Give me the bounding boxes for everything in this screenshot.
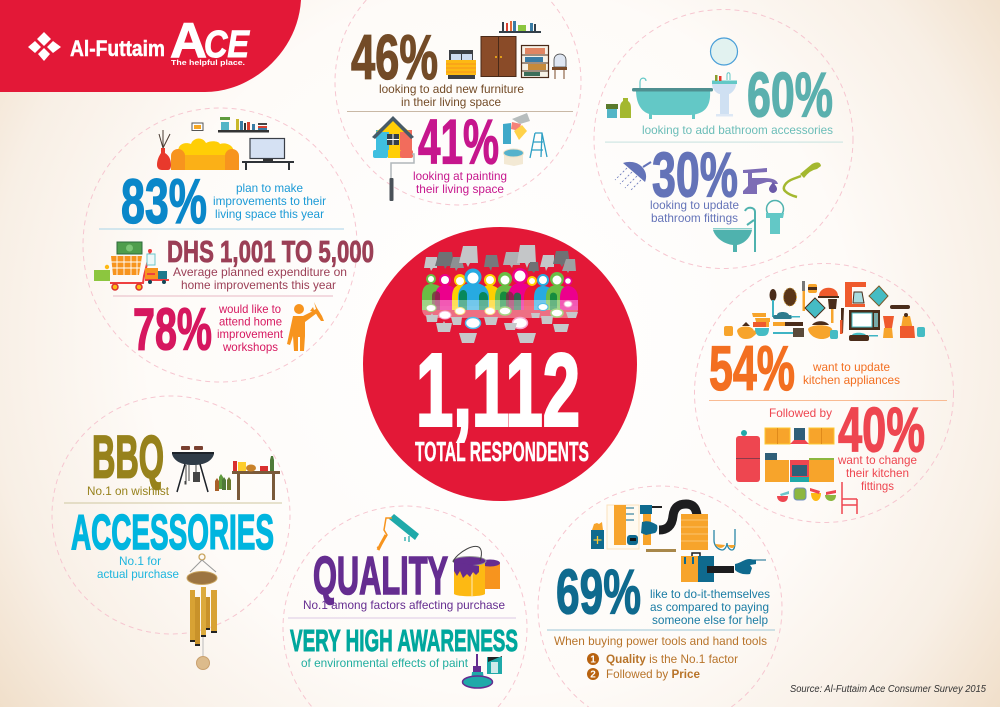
icon: basin with faucet (713, 208, 755, 252)
icon: paint roller (377, 514, 419, 550)
text: add new furniture: looking to add new furniture (379, 82, 524, 96)
text: plan to make improvements: plan to make (236, 181, 303, 195)
text: attend workshops (217, 302, 284, 354)
text: change kitchen fittings: their kitchen (846, 466, 909, 480)
stat: 46%: 46% (351, 23, 438, 93)
icon: Al-Futtaim emblem (28, 32, 61, 61)
icon: wind chime (187, 554, 217, 670)
panel: wishlist and purchases (52, 396, 290, 670)
text: when buying power tools: When buying power tools and hand tools (554, 634, 767, 648)
panel: bathroom (594, 10, 853, 268)
text: do-it-themselves (650, 587, 770, 627)
icon: fitted kitchen (736, 428, 834, 482)
icon: crowd of people (422, 268, 578, 318)
heading: quality: QUALITY (313, 546, 448, 606)
list item 1: quality: Quality is the No.1 factor (606, 652, 738, 666)
panel: total respondents (363, 227, 637, 501)
text: plan to make improvements (213, 181, 326, 221)
icon: bathtub, mirror and sink (606, 38, 738, 119)
text: update kitchen appliances: kitchen appliances (803, 373, 900, 387)
icon: bed, wardrobe, bookcase, dresser (446, 21, 567, 79)
text: no.1 for actual purchase: actual purchase (97, 567, 179, 581)
text: do-it-themselves: someone else for help (652, 613, 768, 627)
list item 1: quality: 1 (590, 654, 596, 666)
text: bathroom accessories: looking to add bathroom accessories (642, 123, 833, 137)
text: change kitchen fittings: want to change (837, 453, 917, 467)
logo text: Al-Futtaim: Al-Futtaim (70, 36, 165, 61)
stat: 41%: 41% (418, 108, 499, 178)
icon: brush and glove (462, 654, 502, 688)
stat: 54%: 54% (709, 334, 795, 404)
number: 1,112: 1,112 (416, 332, 580, 448)
text: painting their living space: looking at painting (413, 169, 507, 183)
text: plan to make improvements: improvements to their (213, 194, 326, 208)
panel: do-it-yourself tools (538, 486, 782, 707)
stat: 40%: 40% (838, 396, 925, 466)
icon: worker with wrench (287, 302, 324, 351)
icon: tools (591, 504, 766, 582)
text: change kitchen fittings (837, 453, 917, 493)
icon: reflected crowd heads and bubbles (426, 301, 578, 343)
stat: 78%: 78% (133, 296, 212, 362)
icon: barbecue grill and table (172, 446, 280, 500)
icon: paint cans (453, 546, 500, 596)
heading: accessories: ACCESSORIES (71, 506, 274, 560)
text: attend workshops: workshops (222, 340, 278, 354)
icon: kitchen utensils (724, 281, 925, 341)
stat: 83%: 83% (121, 167, 207, 237)
text: add new furniture: in their living space (401, 95, 501, 109)
text: no.1 for actual purchase: No.1 for (119, 554, 161, 568)
text: attend workshops: would like to (218, 302, 281, 316)
text: do-it-themselves: like to do-it-themselves (650, 587, 770, 601)
text: add new furniture (379, 82, 524, 109)
heading: very high awareness: VERY HIGH AWARENESS (290, 623, 518, 658)
text: no.1 among factors: No.1 among factors affecting purchase (303, 598, 505, 612)
list item 2: price: Followed by Price (606, 667, 700, 681)
icon: house and paint roller (372, 116, 414, 201)
stat: 69%: 69% (556, 558, 641, 628)
list item 2: price: 2 (590, 670, 596, 680)
text: painting their living space (413, 169, 507, 196)
icon: swatches, paint can, ladder (503, 113, 547, 166)
stat: 30%: 30% (652, 140, 738, 210)
stat: 60%: 60% (747, 60, 833, 130)
text: followed by: Followed by (769, 406, 832, 420)
panel: furniture and painting (335, 0, 581, 205)
text: average planned expenditure (173, 265, 347, 292)
text: update bathroom fittings (650, 198, 739, 225)
panel: quality and awareness (283, 506, 527, 707)
logo text: ACE (170, 14, 250, 68)
text: no.1 for actual purchase (97, 554, 179, 581)
text: painting their living space: their living space (416, 182, 504, 196)
icon: speech bubbles above crowd (424, 245, 576, 273)
logo text: ACE: CE (204, 24, 250, 66)
icon: bowls and chair (777, 482, 857, 514)
icon: living room (157, 117, 294, 170)
label: total respondents: TOTAL RESPONDENTS (415, 436, 589, 467)
panel: kitchen (694, 264, 954, 522)
text: average planned expenditure: Average planned expenditure on (173, 265, 347, 279)
logo text: ACE: A (170, 14, 207, 68)
text: update bathroom fittings: bathroom fittings (651, 211, 738, 225)
icon: shower head (615, 162, 651, 191)
text: update bathroom fittings: looking to update (650, 198, 739, 212)
source note: Source: Al-Futtaim Ace Consumer Survey 2015 (790, 684, 986, 695)
text: attend workshops: attend home (219, 314, 282, 328)
text: plan to make improvements: living space this year (215, 207, 324, 221)
text: average planned expenditure: home improvements this year (181, 278, 336, 292)
text: environmental effects: of environmental effects of paint (301, 656, 469, 670)
text: no.1 on wishlist: No.1 on wishlist (87, 484, 170, 498)
icon: shopping cart, money and truck (94, 242, 169, 290)
heading: BBQ: BBQ (92, 424, 164, 490)
panel: living space improvements (83, 108, 374, 382)
heading: DHS 1,001 to 5,000: DHS 1,001 TO 5,000 (167, 234, 374, 269)
icon: tap, hose and towel ring (743, 162, 821, 234)
text: change kitchen fittings: fittings (861, 479, 894, 493)
header banner with logo (0, 0, 301, 92)
text: update kitchen appliances: want to update (812, 360, 890, 374)
text: do-it-themselves: as compared to paying (650, 600, 769, 614)
text: update kitchen appliances (803, 360, 900, 387)
logo tagline: The helpful place. (171, 60, 245, 67)
text: attend workshops: improvement (217, 327, 284, 341)
